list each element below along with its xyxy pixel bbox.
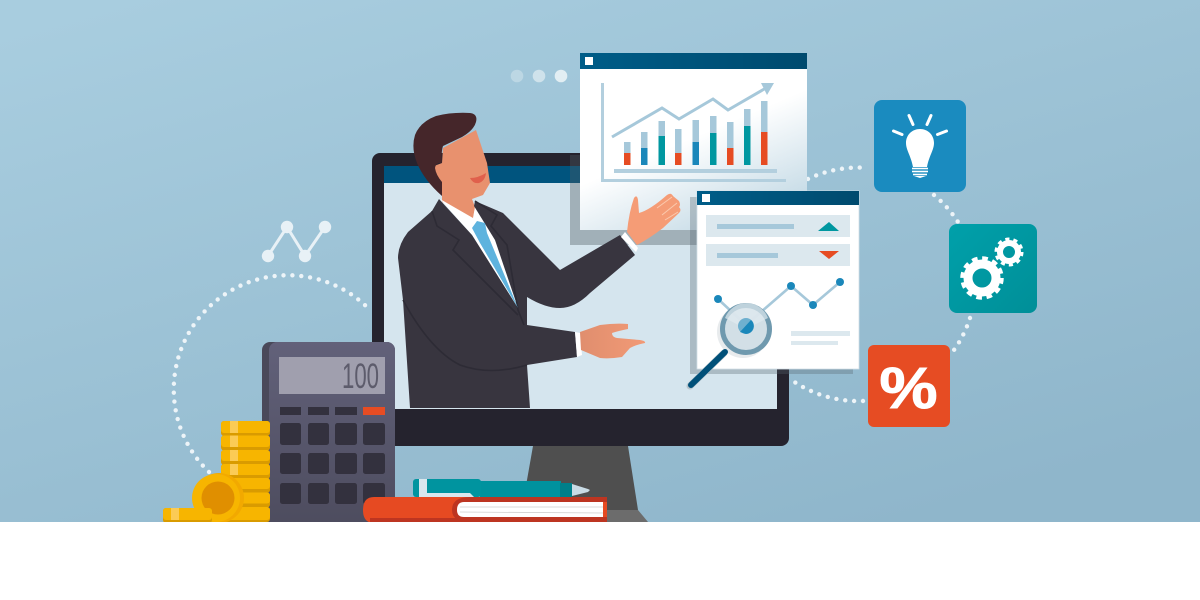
businessman (262, 113, 680, 527)
suit (398, 199, 635, 408)
report window body (697, 191, 859, 369)
report window (697, 191, 859, 369)
icon: light bulb (874, 100, 966, 192)
text lines (791, 331, 850, 345)
function keys (280, 407, 385, 415)
mouth (470, 173, 486, 183)
chart window shadow (570, 155, 697, 245)
pen (413, 479, 590, 497)
monitor (372, 153, 789, 522)
number keys (280, 423, 385, 504)
chart window (580, 53, 807, 230)
bar chart (624, 101, 768, 165)
flat coin (163, 508, 212, 523)
monitor screen header (384, 166, 580, 183)
upper hand (627, 194, 680, 245)
neck and face (434, 130, 490, 219)
lower hand (580, 324, 645, 358)
calculator (262, 342, 395, 527)
suit lapels (403, 201, 527, 370)
calculator body (262, 342, 395, 527)
report window header (697, 191, 859, 205)
line chart (714, 278, 844, 311)
row up (706, 215, 850, 237)
trend arrow (612, 83, 774, 137)
row down (706, 244, 850, 266)
monitor frame (372, 153, 789, 446)
standing coin (192, 473, 244, 523)
calculator display (279, 357, 385, 394)
dotted arc: left (174, 275, 367, 472)
icon: percent (868, 345, 950, 427)
icon: gears (949, 224, 1037, 313)
dotted arcs: right (793, 168, 970, 401)
monitor stand (526, 446, 648, 522)
icon: small line graph (262, 221, 331, 262)
chart window header (580, 53, 807, 69)
three loading dots (511, 70, 567, 82)
display digits: 100 (342, 357, 379, 396)
shirt (440, 199, 518, 308)
chart window body (580, 53, 807, 230)
report window shadow (690, 197, 853, 374)
hair (413, 113, 476, 196)
icon: percent: % (880, 356, 938, 421)
coin stack (221, 421, 270, 522)
lower cuff (575, 332, 582, 357)
tie (472, 221, 518, 308)
magnifying glass (690, 303, 770, 386)
upper cuff (621, 232, 638, 252)
book (363, 497, 607, 523)
chart axes (601, 83, 786, 182)
monitor screen (384, 183, 777, 409)
